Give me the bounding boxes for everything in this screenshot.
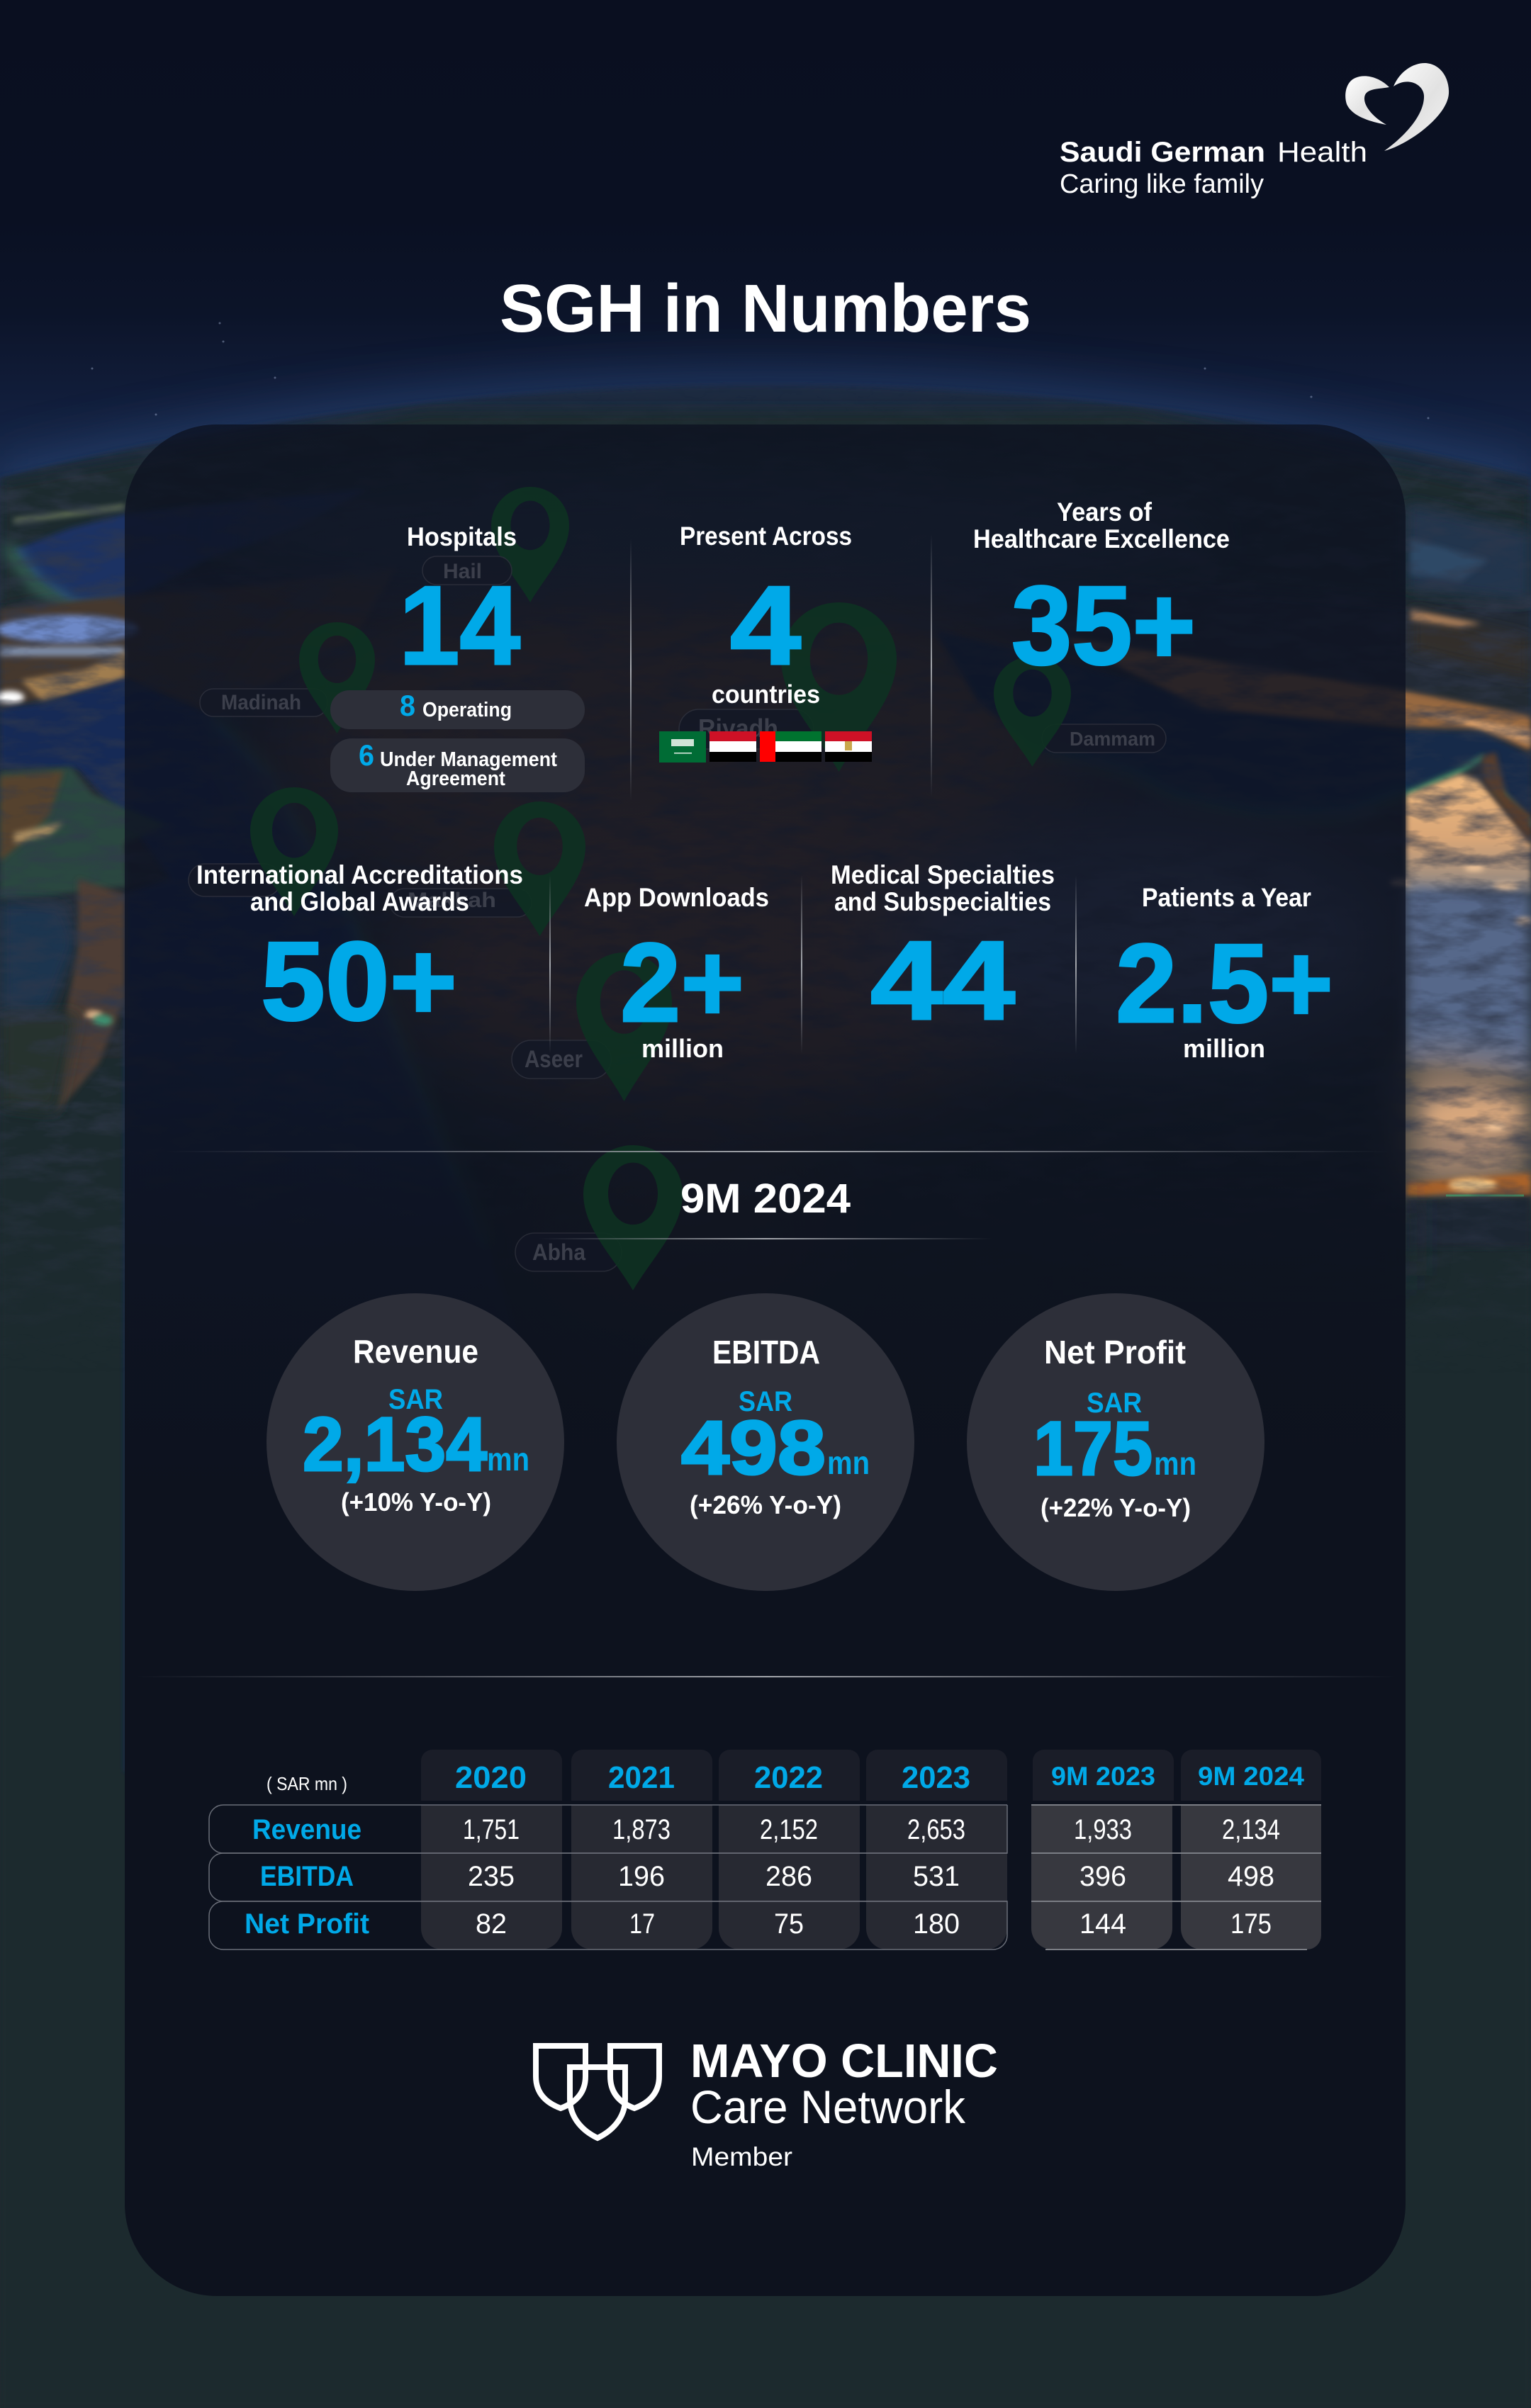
pin: Madinah: Madinah (221, 691, 301, 714)
header row: 2023 (902, 1760, 970, 1795)
pill: under management: Agreement (406, 767, 505, 790)
row: revenue: 1,873 (612, 1814, 671, 1845)
financial table (209, 1750, 1321, 1950)
stat: accreditations (196, 860, 523, 1044)
sub wordmark: Care Network (690, 2081, 966, 2133)
heading: Patients a Year (1142, 883, 1311, 912)
wordmark: MAYO CLINIC (690, 2035, 998, 2088)
row: net profit: 175 (1230, 1908, 1272, 1940)
brand name: Saudi German (1060, 137, 1265, 168)
icon: heart (1345, 63, 1449, 151)
value: 498 (681, 1405, 826, 1490)
island left (0, 765, 125, 899)
header row: 9M 2023 (1051, 1762, 1155, 1791)
header row: 2022 (754, 1760, 823, 1795)
number: 14 (399, 563, 520, 688)
pin: Dammam (994, 656, 1166, 767)
row: revenue: 2,134 (1222, 1814, 1280, 1845)
row: revenue (252, 1814, 1280, 1845)
row: revenue: Revenue (252, 1814, 361, 1845)
label: Revenue (353, 1333, 478, 1370)
pin: Hail (422, 487, 569, 602)
flag: Egypt (825, 731, 872, 762)
pin: Aseer: Aseer (525, 1046, 583, 1073)
city lights, east (1390, 865, 1531, 1130)
pin: Abha (515, 1145, 683, 1290)
unit: countries (712, 680, 820, 709)
heading line 2: and Subspecialties (834, 887, 1051, 916)
tagline: Caring like family (1060, 169, 1264, 199)
number: 35+ (1011, 563, 1196, 688)
number: 2+ (620, 921, 744, 1045)
pin: Riyadh (679, 602, 897, 772)
currency: SAR (388, 1384, 443, 1415)
value: 175 (1033, 1405, 1153, 1491)
pin: Makkah (390, 801, 585, 936)
stars (91, 322, 1429, 420)
stat: present across (659, 522, 872, 763)
sea lower left (0, 901, 78, 1013)
pill: operating: Operating (422, 699, 512, 721)
land band and clouds, left (0, 593, 125, 708)
number: 2.5+ (1116, 921, 1333, 1046)
pin: Hail: Hail (443, 560, 482, 583)
row: net profit: Net Profit (245, 1908, 369, 1940)
unit: mn (1154, 1445, 1196, 1482)
unit: million (1183, 1034, 1265, 1063)
number: 4 (730, 563, 801, 688)
label: EBITDA (712, 1334, 820, 1371)
pin: Madinah (200, 622, 375, 733)
pill: under management: Under Management (380, 748, 557, 771)
orange band north of gulf (1063, 638, 1531, 751)
heading: App Downloads (584, 883, 769, 912)
gulf sea east (936, 631, 1531, 826)
row outlines, left block (209, 1805, 1007, 1950)
row: net profit: 144 (1079, 1908, 1126, 1940)
icon: three shields (536, 2046, 659, 2138)
heading line 1: Medical Specialties (831, 860, 1055, 889)
row outlines, right block (1031, 1805, 1321, 1950)
pill: operating (330, 689, 585, 729)
row: revenue: 2,152 (760, 1814, 818, 1845)
stat: years of excellence (973, 497, 1230, 688)
heading line 2: and Global Awards (250, 887, 469, 916)
row: net profit (245, 1908, 1272, 1940)
row: EBITDA: 396 (1079, 1861, 1126, 1892)
stat: app downloads (584, 883, 769, 1063)
label: Net Profit (1044, 1334, 1186, 1371)
heading: Hospitals (407, 522, 517, 551)
row: net profit: 75 (774, 1908, 804, 1940)
number: 44 (870, 918, 1015, 1043)
logo: Mayo Clinic Care Network (536, 2035, 998, 2171)
row: EBITDA: EBITDA (260, 1861, 354, 1892)
kpi circle: net profit (967, 1293, 1264, 1591)
bright eastern desert (1406, 774, 1531, 893)
flag: Yemen (710, 731, 756, 762)
sea: main western sea (0, 675, 352, 1772)
row: net profit: 82 (476, 1908, 507, 1940)
row: EBITDA: 286 (766, 1861, 812, 1892)
heading: 9M 2024: 9M 2024 (680, 1176, 851, 1222)
map pins and city labels (189, 487, 1166, 1290)
pin: Makkah: Makkah (408, 889, 496, 912)
currency: SAR (739, 1386, 792, 1417)
flag: UAE (760, 731, 821, 762)
pin: Riyadh: Riyadh (698, 714, 778, 743)
row: EBITDA: 498 (1228, 1861, 1274, 1892)
pill: under management (330, 738, 585, 792)
land glow behind card (276, 581, 1070, 907)
brand name light: Health (1277, 137, 1367, 168)
stat: hospitals (330, 522, 585, 792)
heading line 1: Years of (1057, 497, 1153, 527)
row: revenue: 1,751 (463, 1814, 520, 1845)
pill: operating: 8 (400, 689, 415, 722)
heading line 2: Healthcare Excellence (973, 524, 1230, 553)
growth: (+10% Y-o-Y) (341, 1487, 491, 1517)
sea: upper left basin (14, 499, 313, 602)
flags (659, 731, 872, 763)
stat: patients (1116, 883, 1333, 1063)
pin: Dammam: Dammam (1070, 728, 1155, 750)
heading: Present Across (680, 522, 852, 551)
header row: 9M 2024 (1198, 1762, 1304, 1791)
row: EBITDA: 531 (913, 1861, 960, 1892)
unit note: ( SAR mn ) (267, 1773, 347, 1794)
row: EBITDA (260, 1861, 1274, 1892)
logo: Saudi German Health (1060, 63, 1449, 199)
header row (455, 1760, 1304, 1795)
terrain texture (0, 383, 1531, 1375)
value: 2,134 (303, 1401, 487, 1487)
title: SGH in Numbers (500, 271, 1031, 347)
growth: (+22% Y-o-Y) (1041, 1493, 1191, 1522)
row: EBITDA: 196 (618, 1861, 665, 1892)
pin: Abha: Abha (532, 1239, 585, 1265)
growth: (+26% Y-o-Y) (690, 1490, 841, 1519)
kpi circle: revenue (267, 1293, 564, 1591)
flag: Saudi Arabia (659, 731, 706, 763)
column shades (421, 1750, 1321, 1950)
header row: 2020 (455, 1760, 527, 1795)
row: revenue: 2,653 (907, 1814, 965, 1845)
row: net profit: 17 (629, 1908, 655, 1940)
row: net profit: 180 (913, 1908, 960, 1940)
panel: main card (125, 424, 1406, 2296)
heading line 1: International Accreditations (196, 860, 523, 889)
row: revenue: 1,933 (1074, 1814, 1132, 1845)
number: 50+ (261, 919, 457, 1044)
stat: specialties (831, 860, 1055, 1043)
pin: Jeddah (189, 787, 338, 916)
kpi circle: EBITDA (617, 1293, 914, 1591)
row: EBITDA: 235 (468, 1861, 515, 1892)
pill: under management: 6 (359, 738, 374, 772)
dividers: stats (549, 534, 1077, 1054)
member note: Member (691, 2142, 792, 2171)
unit: mn (827, 1444, 870, 1481)
header row: 2021 (608, 1760, 675, 1795)
unit: million (641, 1034, 724, 1063)
currency: SAR (1087, 1388, 1142, 1419)
pin: Aseer (512, 952, 672, 1101)
unit: mn (487, 1441, 529, 1478)
